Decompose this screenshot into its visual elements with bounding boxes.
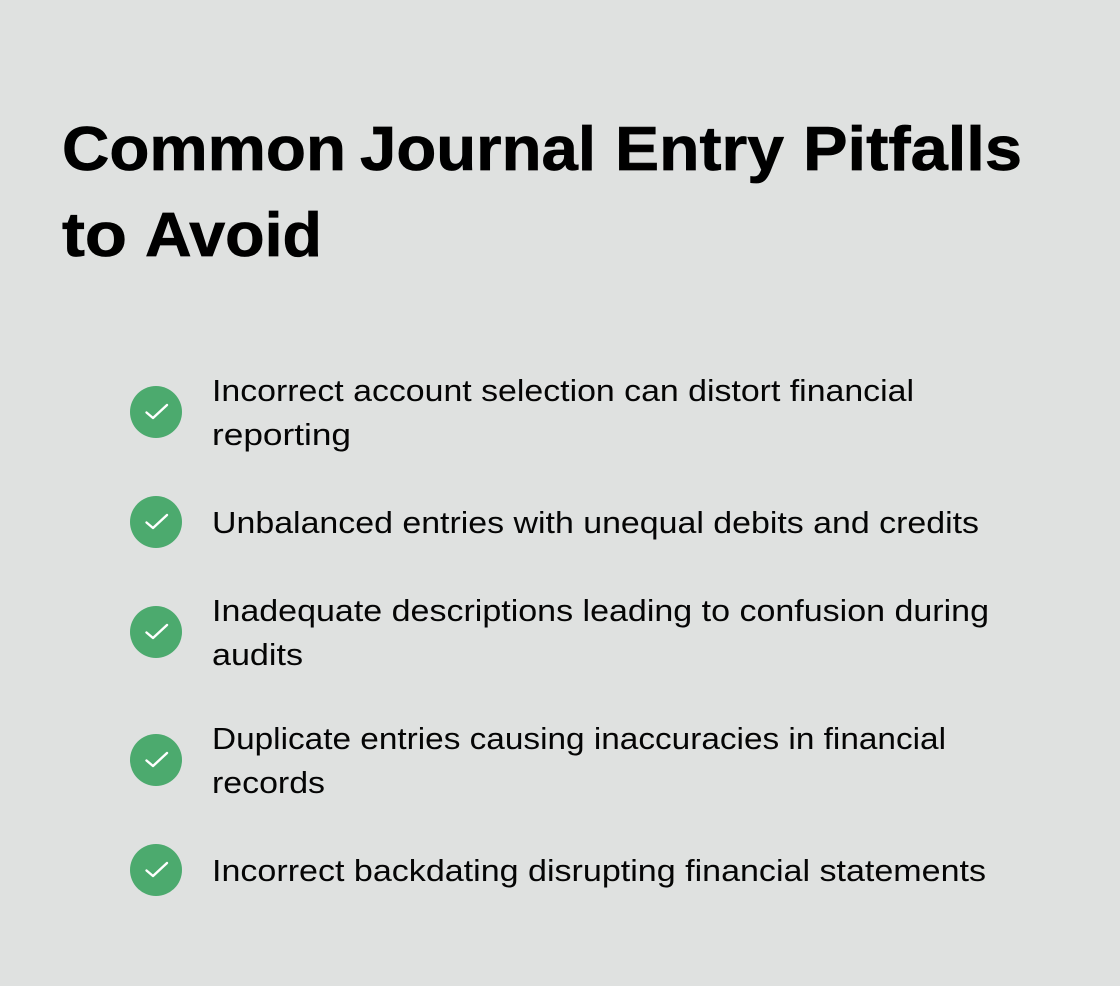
title: Pitfalls: [803, 115, 1022, 184]
text: item 1: reporting: [212, 417, 351, 452]
text: item 3: [212, 593, 989, 672]
title: Entry: [615, 115, 785, 184]
icon: check 3: [130, 606, 182, 658]
title: [62, 115, 1022, 270]
text: item 2: Unbalanced entries with unequal debits and credits: [212, 505, 979, 540]
title: Journal: [360, 115, 596, 184]
icon: check 1: [130, 386, 182, 438]
icon: check 2: [130, 496, 182, 548]
text: item 1: Incorrect account selection can distort financial: [212, 373, 914, 408]
text: item 4: Duplicate entries causing inaccuracies in financial: [212, 721, 946, 756]
text: item 3: audits: [212, 637, 303, 672]
list item 3: [130, 593, 989, 672]
text: item 4: records: [212, 765, 325, 800]
list item 1: [130, 373, 914, 452]
title: Common: [62, 115, 346, 184]
title: Avoid: [145, 201, 322, 270]
list item 5: [130, 844, 986, 896]
text: item 4: [212, 721, 946, 800]
icon: check 5: [130, 844, 182, 896]
list item 2: [130, 496, 979, 548]
text: item 5: Incorrect backdating disrupting financial statements: [212, 853, 986, 888]
title: to: [62, 201, 127, 270]
list item 4: [130, 721, 946, 800]
icon: check 4: [130, 734, 182, 786]
text: item 3: Inadequate descriptions leading to confusion during: [212, 593, 989, 628]
text: item 1: [212, 373, 914, 452]
